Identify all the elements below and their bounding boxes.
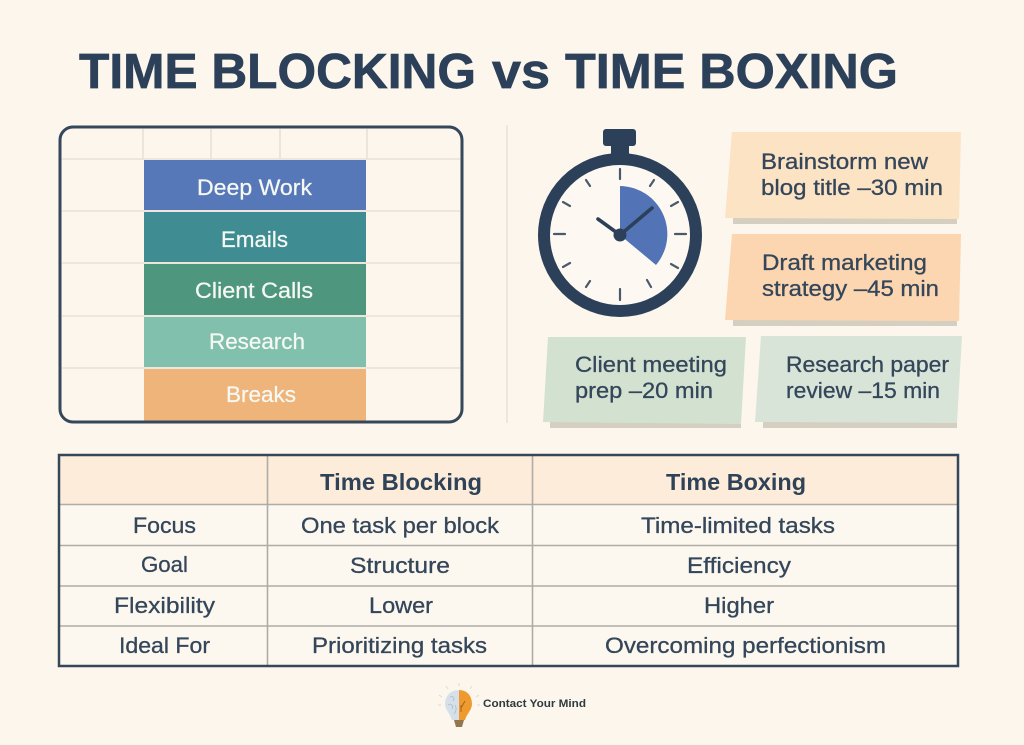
block: Deep Work: Deep Work	[197, 175, 313, 200]
block: Emails	[144, 212, 366, 262]
row: Ideal For: Overcoming perfectionism	[605, 633, 886, 658]
row: Goal: Efficiency	[687, 553, 792, 578]
row: Ideal For	[119, 633, 886, 658]
note: Research paper: Research paper	[786, 352, 950, 377]
row: Goal: Structure	[350, 553, 450, 578]
block: Breaks: Breaks	[226, 382, 296, 407]
note: Research paper: review –15 min	[786, 378, 940, 403]
note: Draft marketing: Draft marketing	[762, 250, 927, 275]
logo: Contact Your Mind	[438, 683, 586, 727]
row: Ideal For: Prioritizing tasks	[312, 633, 487, 658]
row: Focus	[133, 513, 835, 538]
note: Client meeting	[543, 337, 746, 428]
comparison table	[59, 455, 958, 666]
title: TIME BLOCKING	[79, 45, 476, 99]
panel: calendar time blocks	[60, 127, 462, 422]
row: Goal	[141, 552, 792, 578]
block: Research	[144, 317, 366, 367]
divider	[506, 125, 508, 423]
note: Draft marketing	[725, 234, 961, 326]
note: Client meeting: prep –20 min	[575, 378, 713, 403]
note: Brainstorm: Brainstorm new	[761, 149, 929, 174]
note: Draft marketing: strategy –45 min	[762, 276, 939, 301]
icon: stopwatch	[544, 129, 696, 311]
icon: half brain half bulb	[438, 683, 480, 727]
note: Brainstorm	[725, 132, 961, 224]
logo: Contact Your Mind: Contact Your Mind	[483, 698, 586, 710]
row: Focus: One task per block	[301, 513, 500, 538]
title	[79, 45, 898, 99]
row: Flexibility: Flexibility	[114, 593, 216, 618]
row: Focus: Focus	[133, 513, 196, 538]
block: Research: Research	[209, 329, 305, 354]
block: Deep Work	[144, 160, 366, 210]
note: Client meeting: Client meeting	[575, 352, 727, 377]
row: Ideal For: Ideal For	[119, 633, 211, 658]
block: Client Calls	[144, 264, 366, 315]
table header: Time Boxing	[666, 469, 806, 495]
table header	[60, 456, 957, 504]
row: Flexibility: Lower	[369, 593, 434, 618]
block: Emails: Emails	[221, 227, 288, 252]
block: Client Calls: Client Calls	[195, 278, 313, 303]
block: Breaks	[144, 369, 366, 421]
table header: Time Blocking	[320, 469, 482, 495]
row: Goal: Goal	[141, 552, 188, 577]
row: Flexibility: Higher	[704, 593, 775, 618]
title: TIME BOXING	[565, 45, 898, 99]
title: vs	[492, 45, 550, 99]
note: Brainstorm: blog title –30 min	[761, 175, 943, 200]
row: Focus: Time-limited tasks	[641, 513, 835, 538]
row: Flexibility	[114, 593, 775, 618]
note: Research paper	[755, 336, 962, 428]
